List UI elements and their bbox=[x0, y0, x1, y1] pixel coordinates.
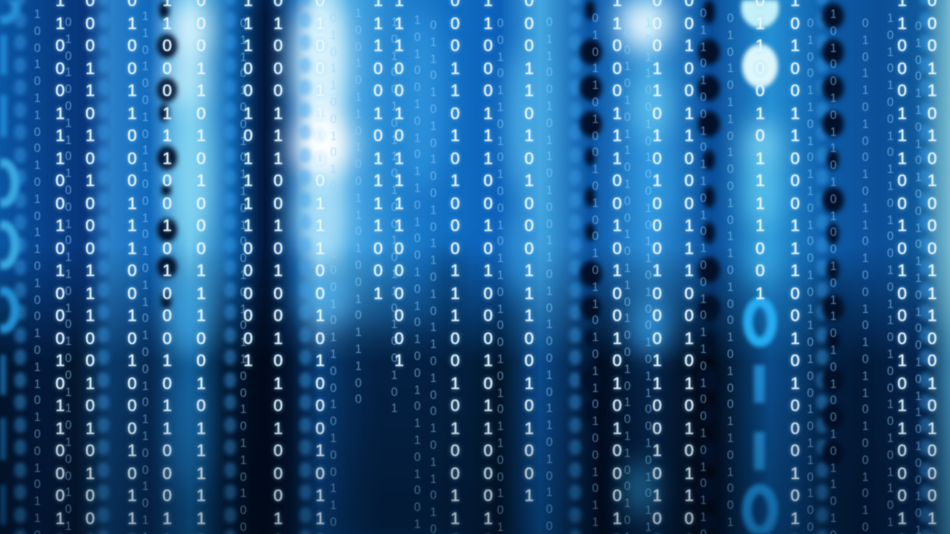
big digit: blue zero lower bbox=[747, 489, 773, 531]
bright foreground digit columns: 11100101111001 bbox=[373, 0, 383, 302]
bright foreground digit columns: 11100101111000001 bbox=[394, 0, 404, 370]
small dim digit columns: 10100101011010010101001011010010 bbox=[414, 13, 421, 534]
small dim digit columns: 01010110100101101001010011010010 bbox=[727, 11, 734, 534]
small dim digit columns: 10010110010101101001011010010110 bbox=[34, 7, 41, 534]
background: bright blue upper gradient bbox=[0, 0, 950, 356]
big digit: blue one bbox=[754, 365, 765, 403]
big digit: blue zero middle bbox=[748, 302, 772, 342]
bright foreground digit columns: 01100101111001 bbox=[755, 0, 765, 302]
small dim digit columns: 100101101001101001011100 bbox=[355, 6, 362, 406]
small dim digit columns: 101001011010010110100101 bbox=[391, 15, 398, 415]
small dim digit columns: 11010010110010101101001011001011 bbox=[142, 9, 149, 534]
blobs: column 833 bbox=[822, 3, 844, 466]
blobs: column 709 bbox=[698, 0, 720, 534]
bright foreground digit columns: 00011010100011100101001 bbox=[524, 0, 534, 505]
big digit: blue one lower bbox=[754, 432, 765, 470]
small dim digit columns: 01011001010110100101100101001101 bbox=[330, 11, 337, 534]
big digit: left edge zeros bbox=[0, 0, 16, 329]
small dim digit columns: 01101001011010100101101001010110 bbox=[700, 6, 707, 534]
big digit: left edge ones bbox=[0, 35, 7, 525]
bright foreground digit columns: 11100101111000001 bbox=[243, 0, 253, 370]
blobs: column 590 bbox=[580, 0, 602, 422]
small dim digit columns: 10101001011010010110100101011010 bbox=[887, 11, 894, 534]
big digit: bright zero top bbox=[742, 44, 778, 88]
blobs: column 167 bbox=[157, 1, 177, 309]
small dim digit columns: 01011010010100101101011010010110 bbox=[592, 11, 599, 534]
big digit: bright zero upper bbox=[741, 0, 779, 28]
small dim digit columns: 10010101101001011010010101100101 bbox=[624, 9, 631, 534]
small dim digit columns: 10100101101010010110101001011010 bbox=[830, 7, 837, 534]
